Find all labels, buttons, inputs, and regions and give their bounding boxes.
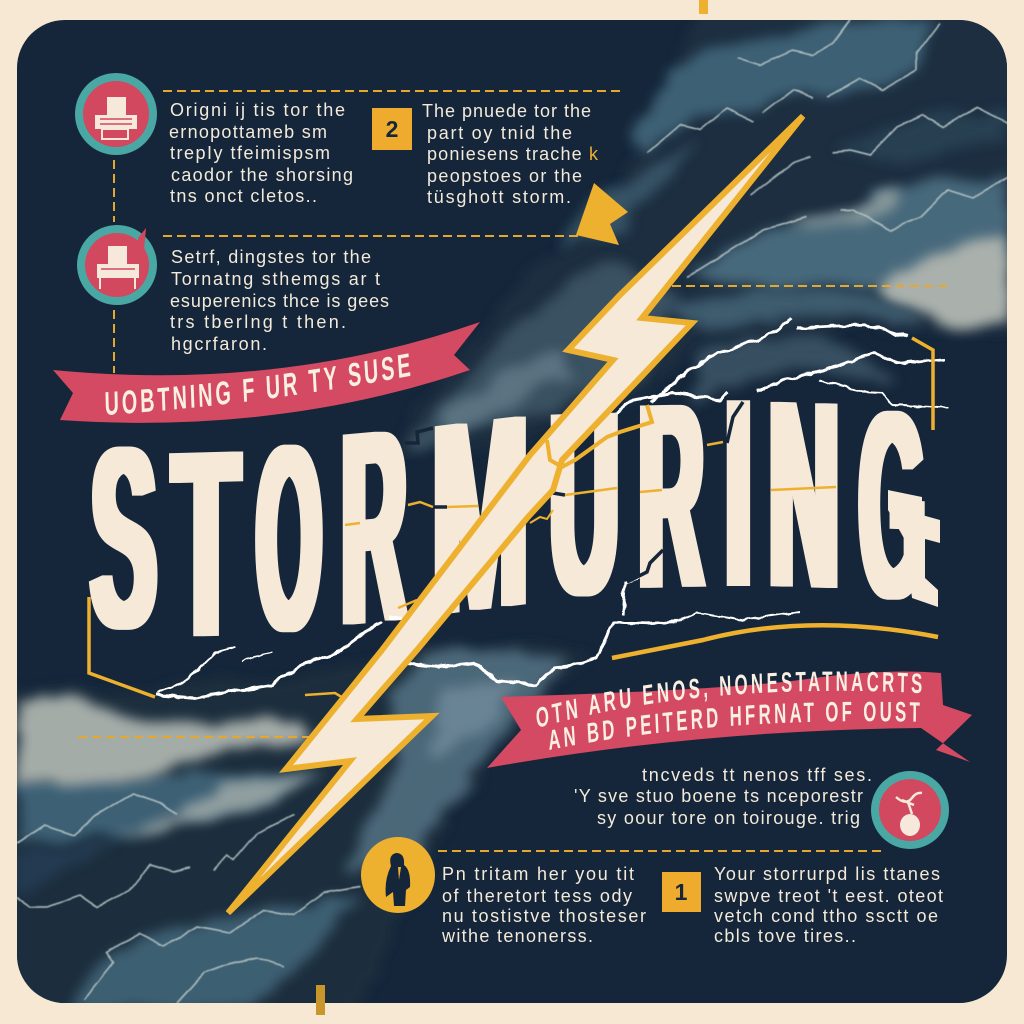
lightning bolt <box>228 116 803 913</box>
number square 1: 1 <box>675 879 688 905</box>
title: STORMURING: G <box>860 355 925 655</box>
text block: middle left: esuperenics thce is gees <box>170 291 389 311</box>
ribbon text line two: AN BD PEITERD HFRNAT OF OUST <box>549 702 920 750</box>
text block: bottom centre: of theretort tess ody <box>442 886 632 906</box>
text block: bottom right: cbls tove tires.. <box>714 926 856 946</box>
text block: top left <box>169 100 353 206</box>
lower ribbon <box>487 672 972 768</box>
cloud band upper right <box>400 0 1024 455</box>
white lightning cracks <box>156 318 948 698</box>
registration tick bottom <box>316 985 325 1015</box>
text block: middle left: Tornatng sthemgs ar t <box>171 269 380 289</box>
title: STORMURING: N <box>769 344 839 645</box>
text block: bottom centre: withe tenonerss. <box>441 926 593 946</box>
text block: middle left <box>170 247 389 354</box>
title: STORMURING: S <box>91 394 156 684</box>
title: STORMURING <box>91 341 925 695</box>
yellow brackets and cracks <box>89 338 938 702</box>
dark cracks through title <box>405 402 743 582</box>
text block: top left: caodor the shorsing <box>171 165 353 185</box>
title: STORMURING: R <box>342 370 406 684</box>
text block: bottom right <box>714 864 943 946</box>
title: STORMURING: M <box>432 358 529 674</box>
number square 1 <box>662 872 701 912</box>
number square 2 <box>372 108 412 150</box>
text block: top left: ernopottameb sm <box>169 122 327 142</box>
text block: top centre: poniesens trache k <box>427 144 599 164</box>
title G spur <box>888 490 940 607</box>
ribbon text: UOBTNING F UR TY SUSE <box>106 353 410 415</box>
text block: top left: Origni ij tis tor the <box>170 100 345 120</box>
text block: top centre: peopstoes or the <box>427 166 582 186</box>
icon: knot badge <box>871 771 949 849</box>
title: STORMURING: T <box>173 394 239 695</box>
text block: middle left: Setrf, dingstes tor the <box>171 247 371 267</box>
icon: person badge <box>361 837 435 913</box>
text block: bottom right: vetch cond ttho ssctt oe <box>714 906 938 926</box>
text block: top left: tns onct cletos.. <box>170 186 317 206</box>
text block: middle left: hgcrfaron. <box>171 334 267 354</box>
dashed connector lines <box>78 91 950 851</box>
yellow arrow head <box>576 183 628 245</box>
text block: top centre: The pnuede tor the <box>422 101 591 121</box>
title: STORMURING: R <box>639 347 703 644</box>
registration tick top <box>699 0 708 14</box>
text block: lower right <box>574 765 872 828</box>
text block: top left: trepIy tfeimispsm <box>170 143 330 163</box>
text block: top centre: tüsghott storm. <box>427 187 571 207</box>
text block: middle left: trs tberlng t then. <box>170 312 346 332</box>
text block: bottom centre: Pn tritam her you tit <box>442 864 634 884</box>
icon: machine badge one <box>75 73 157 155</box>
text block: top centre <box>422 101 599 207</box>
text block: bottom centre <box>441 864 646 946</box>
text block: bottom centre: nu tostistve thosteser <box>442 906 646 926</box>
text block: lower right: sy oour tore on toirouge. trig <box>597 808 860 828</box>
yellow hook on bolt <box>547 405 652 467</box>
title: STORMURING: O <box>257 387 321 689</box>
text block: bottom right: Your storrurpd lis ttanes <box>714 864 940 884</box>
ribbon text line one: OTN ARU ENOS, NONESTATNACRTS <box>536 672 922 727</box>
number square 2: 2 <box>386 116 398 142</box>
cloud band lower left <box>0 650 590 1024</box>
text block: top centre: part oy tnid the <box>427 123 572 143</box>
text block: lower right: 'Y sve stuo boene ts nceporestr <box>574 786 863 806</box>
top ribbon <box>53 322 480 423</box>
text block: lower right: tncveds tt nenos tff ses. <box>642 765 872 785</box>
title: STORMURING: I <box>726 341 751 643</box>
title: STORMURING: U <box>550 356 619 651</box>
text block: bottom right: swpve treot 't eest. oteot <box>714 886 943 906</box>
icon: machine badge two <box>77 225 157 305</box>
